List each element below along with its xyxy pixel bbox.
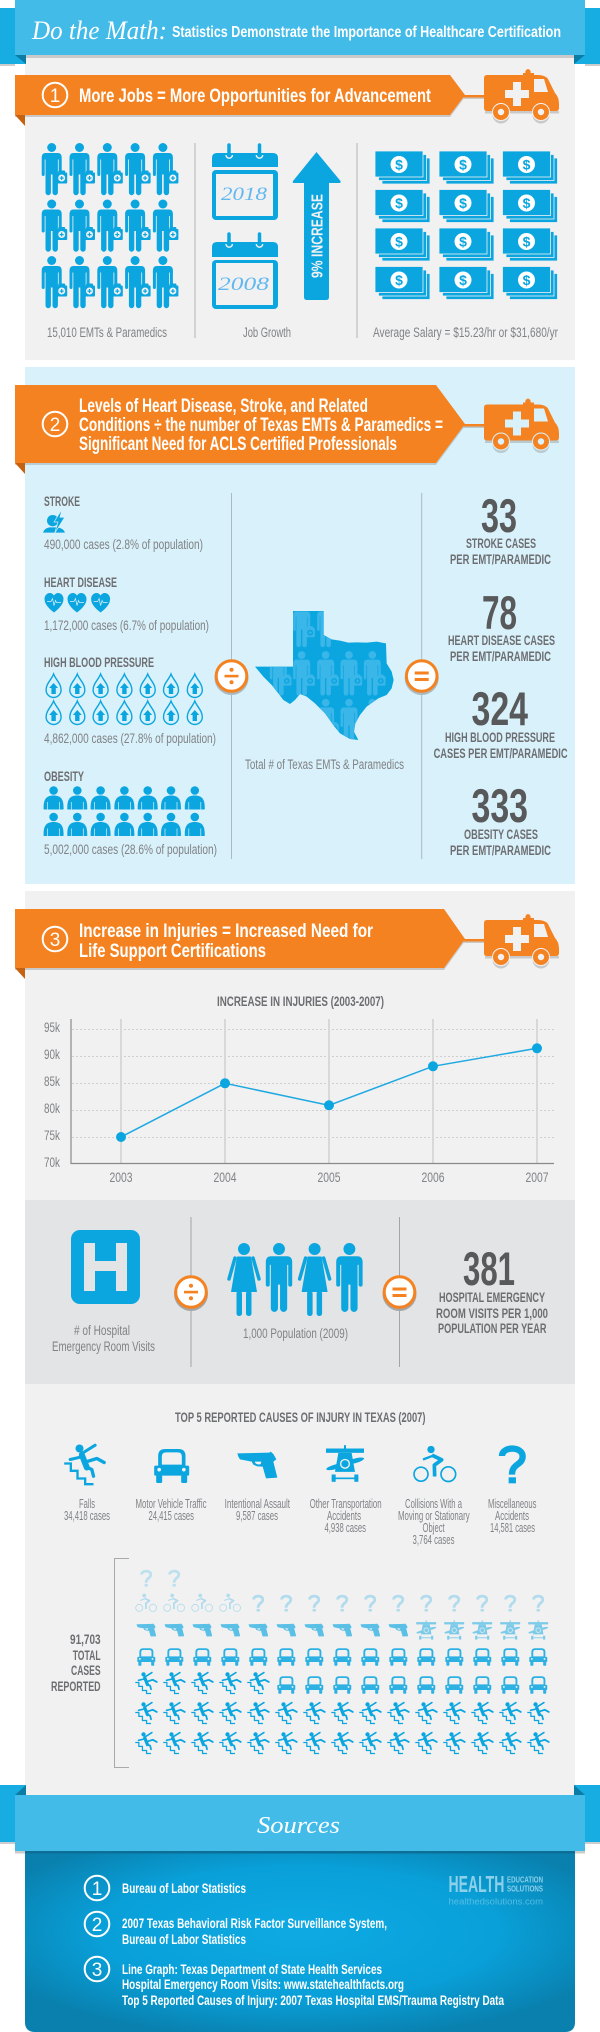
icon: divide sign — [214, 661, 248, 695]
result: 78 heart disease cases — [448, 586, 555, 664]
high blood pressure stat: HIGH BLOOD PRESSURE — [44, 655, 154, 670]
obesity stat — [43, 769, 217, 857]
icon: calendar 2018 — [212, 145, 278, 220]
heart disease stat: 1,172,000 cases (6.7% of population) — [44, 618, 209, 633]
y axis labels: 95k — [44, 1020, 60, 1035]
title script: Do the Math: — [31, 16, 167, 45]
y axis labels — [44, 1020, 60, 1170]
source 1: Bureau of Labor Statistics — [122, 1881, 246, 1896]
result: 333 obesity cases: PER EMT/PARAMEDIC — [450, 843, 551, 858]
icons: obese figures — [43, 786, 205, 836]
total: 91,703 cases: CASES — [71, 1663, 101, 1678]
stroke stat: STROKE — [44, 494, 80, 509]
cause: miscellaneous accidents: 14,581 cases — [490, 1521, 535, 1535]
section 2 heading — [79, 395, 443, 455]
section 2 heading: Levels of Heart Disease, Stroke, and Related — [79, 395, 368, 417]
source 3: Hospital Emergency Room Visits: www.statehealthfacts.org — [122, 1977, 404, 1992]
title banner — [0, 0, 600, 66]
source 2: 2007 Texas Behavioral Risk Factor Surveillance System, — [122, 1916, 387, 1931]
map: Texas with EMT figures — [255, 603, 394, 743]
cause: collisions: Object — [422, 1521, 445, 1535]
sources title: Sources — [257, 1813, 340, 1839]
result: 333 obesity cases — [450, 779, 551, 858]
number 3: 3 — [50, 930, 60, 951]
source 3: Line Graph: Texas Department of State Health Services — [122, 1962, 382, 1977]
panel: section 2 background — [25, 367, 575, 884]
row: bikes and miscellaneous — [136, 1594, 543, 1612]
logo: Health Education Solutions: SOLUTIONS — [507, 1884, 543, 1894]
stroke stat: 490,000 cases (2.8% of population) — [44, 537, 203, 552]
panel: section 1 background — [25, 55, 575, 360]
row: guns and planes — [137, 1620, 549, 1640]
result: 78 heart disease cases: PER EMT/PARAMEDIC — [450, 649, 551, 664]
icon: calendar 2008 — [212, 234, 278, 309]
icon: divide sign — [174, 1277, 208, 1311]
icon: ambulance 1 — [484, 69, 559, 124]
source 1: 1 — [92, 1879, 102, 1900]
result: 333 obesity cases: 333 — [472, 779, 528, 832]
logo: Health Education Solutions: HEALTH — [448, 1871, 504, 1897]
cause: collisions: Moving or Stationary — [398, 1509, 470, 1523]
cause: motor vehicle traffic: Motor Vehicle Traffic — [136, 1497, 206, 1511]
source 2: Bureau of Labor Statistics — [122, 1932, 246, 1947]
total: 91,703 cases: REPORTED — [51, 1679, 101, 1694]
caption: total Texas EMTs: Total # of Texas EMTs & Paramedics — [245, 757, 404, 772]
icons: 12 money stacks — [375, 151, 558, 300]
icon: ambulance 3 — [484, 914, 559, 968]
icon: stroke — [43, 509, 65, 533]
cause: miscellaneous accidents: Miscellaneous — [488, 1497, 536, 1511]
result: 78 heart disease cases: 78 — [482, 586, 517, 639]
pictogram grid: 91,703 cases by cause — [135, 1571, 549, 1754]
x axis labels: 2006 — [422, 1170, 444, 1185]
panel: hospital visits — [25, 1200, 575, 1384]
caption: hospital visits: # of Hospital — [74, 1323, 130, 1338]
high blood pressure stat: 4,862,000 cases (27.8% of population) — [44, 731, 216, 746]
icon: equals sign — [382, 1277, 416, 1311]
y axis labels: 75k — [44, 1128, 60, 1143]
cause: other transportation accidents: Other Transportation — [310, 1497, 382, 1511]
section 3 heading: Increase in Injuries = Increased Need for — [79, 920, 373, 942]
x axis labels: 2004 — [214, 1170, 237, 1185]
y axis labels: 70k — [44, 1155, 60, 1170]
chart title: INCREASE IN INJURIES (2003-2007) — [217, 994, 384, 1009]
y axis labels: 90k — [44, 1047, 60, 1062]
icon: calendar 2018: 2018 — [221, 184, 268, 205]
icon: ambulance 2 — [484, 398, 559, 453]
result: 33 stroke cases — [450, 489, 551, 567]
icon: equals sign — [405, 661, 439, 695]
line chart: injuries 2003-2007 — [44, 1019, 554, 1185]
arrow: 9% increase: 9% INCREASE — [310, 194, 326, 278]
sources banner — [0, 1785, 600, 1854]
x axis labels: 2005 — [318, 1170, 340, 1185]
icons: population figures — [229, 1243, 363, 1316]
stroke stat — [43, 494, 203, 552]
icons: blood drops — [46, 674, 202, 724]
section 2 heading: Significant Need for ACLS Certified Professionals — [79, 433, 397, 455]
source 3 — [85, 1957, 504, 2008]
number 1 — [43, 83, 67, 107]
result: 33 stroke cases: 33 — [481, 489, 517, 542]
number 2: 2 — [50, 415, 60, 436]
source 3: 3 — [92, 1960, 102, 1981]
section 1 banner — [15, 75, 486, 126]
caption: hospital visits — [52, 1323, 155, 1354]
icons: 15 EMTs — [42, 143, 178, 308]
result: 381 visits: POPULATION PER YEAR — [438, 1321, 547, 1336]
section 3 banner — [15, 909, 486, 979]
cause: intentional assault: 9,587 cases — [236, 1509, 278, 1523]
panel: section 3 background — [25, 891, 575, 1851]
y axis labels: 80k — [44, 1101, 60, 1116]
section 2 banner — [15, 385, 486, 474]
cause: motor vehicle traffic — [136, 1449, 206, 1523]
panel: sources — [25, 1851, 575, 2032]
section 2 heading: Conditions ÷ the number of Texas EMTs & Paramedics = — [79, 414, 443, 436]
cause: miscellaneous accidents — [488, 1449, 536, 1535]
result: 333 obesity cases: OBESITY CASES — [464, 827, 538, 842]
icon: hospital H — [71, 1230, 140, 1304]
cause: collisions: 3,764 cases — [412, 1533, 454, 1547]
cause: falls: Falls — [79, 1497, 95, 1511]
result: 324 high blood pressure cases: 324 — [472, 682, 528, 735]
cause: falls — [64, 1445, 110, 1523]
caption: hospital visits: Emergency Room Visits — [52, 1339, 155, 1354]
heart disease stat: HEART DISEASE — [44, 575, 117, 590]
cause: motor vehicle traffic: 24,415 cases — [148, 1509, 194, 1523]
heading: top 5 causes: TOP 5 REPORTED CAUSES OF INJURY IN TEXAS (2007) — [175, 1410, 426, 1425]
source 2 — [85, 1912, 387, 1947]
obesity stat: 5,002,000 cases (28.6% of population) — [44, 842, 217, 857]
section 3 heading: Life Support Certifications — [79, 940, 266, 962]
obesity stat: OBESITY — [44, 769, 84, 784]
cause: collisions — [398, 1446, 470, 1547]
result: 381 visits: 381 — [463, 1242, 515, 1295]
x axis labels: 2007 — [526, 1170, 548, 1185]
y axis labels: 85k — [44, 1074, 60, 1089]
cause: miscellaneous accidents: Accidents — [495, 1509, 529, 1523]
caption: population: 1,000 Population (2009) — [243, 1326, 348, 1341]
icons: hearts — [44, 593, 110, 612]
icon: calendar 2008: 2008 — [218, 274, 270, 295]
section 3 heading — [79, 920, 373, 962]
row: cars — [137, 1648, 547, 1666]
arrow: 9% increase — [293, 152, 341, 300]
logo: Health Education Solutions: healthedsolutions.com — [448, 1896, 543, 1906]
result: 324 high blood pressure cases — [434, 682, 568, 761]
row: miscellaneous — [142, 1571, 179, 1587]
row: falls and cars — [135, 1672, 547, 1694]
caption: EMTs: 15,010 EMTs & Paramedics — [47, 325, 167, 340]
row: falls — [135, 1702, 549, 1724]
total: 91,703 cases: TOTAL — [73, 1648, 101, 1663]
number 2 — [43, 412, 67, 436]
result: 381 visits: ROOM VISITS PER 1,000 — [436, 1306, 548, 1321]
cause: other transportation accidents — [310, 1445, 382, 1535]
cause: collisions: Collisions With a — [405, 1497, 462, 1511]
data points — [116, 1043, 542, 1142]
caption: job growth: Job Growth — [243, 325, 291, 340]
data line — [121, 1048, 537, 1137]
number 3 — [43, 927, 67, 951]
result: 33 stroke cases: PER EMT/PARAMEDIC — [450, 552, 551, 567]
result: 33 stroke cases: STROKE CASES — [466, 536, 536, 551]
cause: intentional assault — [225, 1452, 290, 1523]
result: 381 visits: HOSPITAL EMERGENCY — [439, 1290, 545, 1305]
cause: other transportation accidents: 4,938 cases — [324, 1521, 366, 1535]
x axis labels — [110, 1170, 548, 1185]
cause: intentional assault: Intentional Assault — [225, 1497, 290, 1511]
heart disease stat — [44, 575, 209, 633]
logo: Health Education Solutions: EDUCATION — [507, 1874, 543, 1884]
source 1 — [85, 1876, 246, 1900]
x axis labels: 2003 — [110, 1170, 132, 1185]
cause: falls: 34,418 cases — [64, 1509, 110, 1523]
number 1: 1 — [50, 86, 60, 107]
cause: other transportation accidents: Accidents — [327, 1509, 361, 1523]
section 1 heading: More Jobs = More Opportunities for Advancement — [79, 85, 431, 107]
high blood pressure stat — [44, 655, 216, 746]
row: falls — [135, 1732, 549, 1754]
result: 381 visits — [436, 1242, 548, 1336]
source 2: 2 — [92, 1915, 102, 1936]
total: 91,703 cases: 91,703 — [70, 1632, 101, 1647]
total: 91,703 cases — [51, 1632, 101, 1694]
